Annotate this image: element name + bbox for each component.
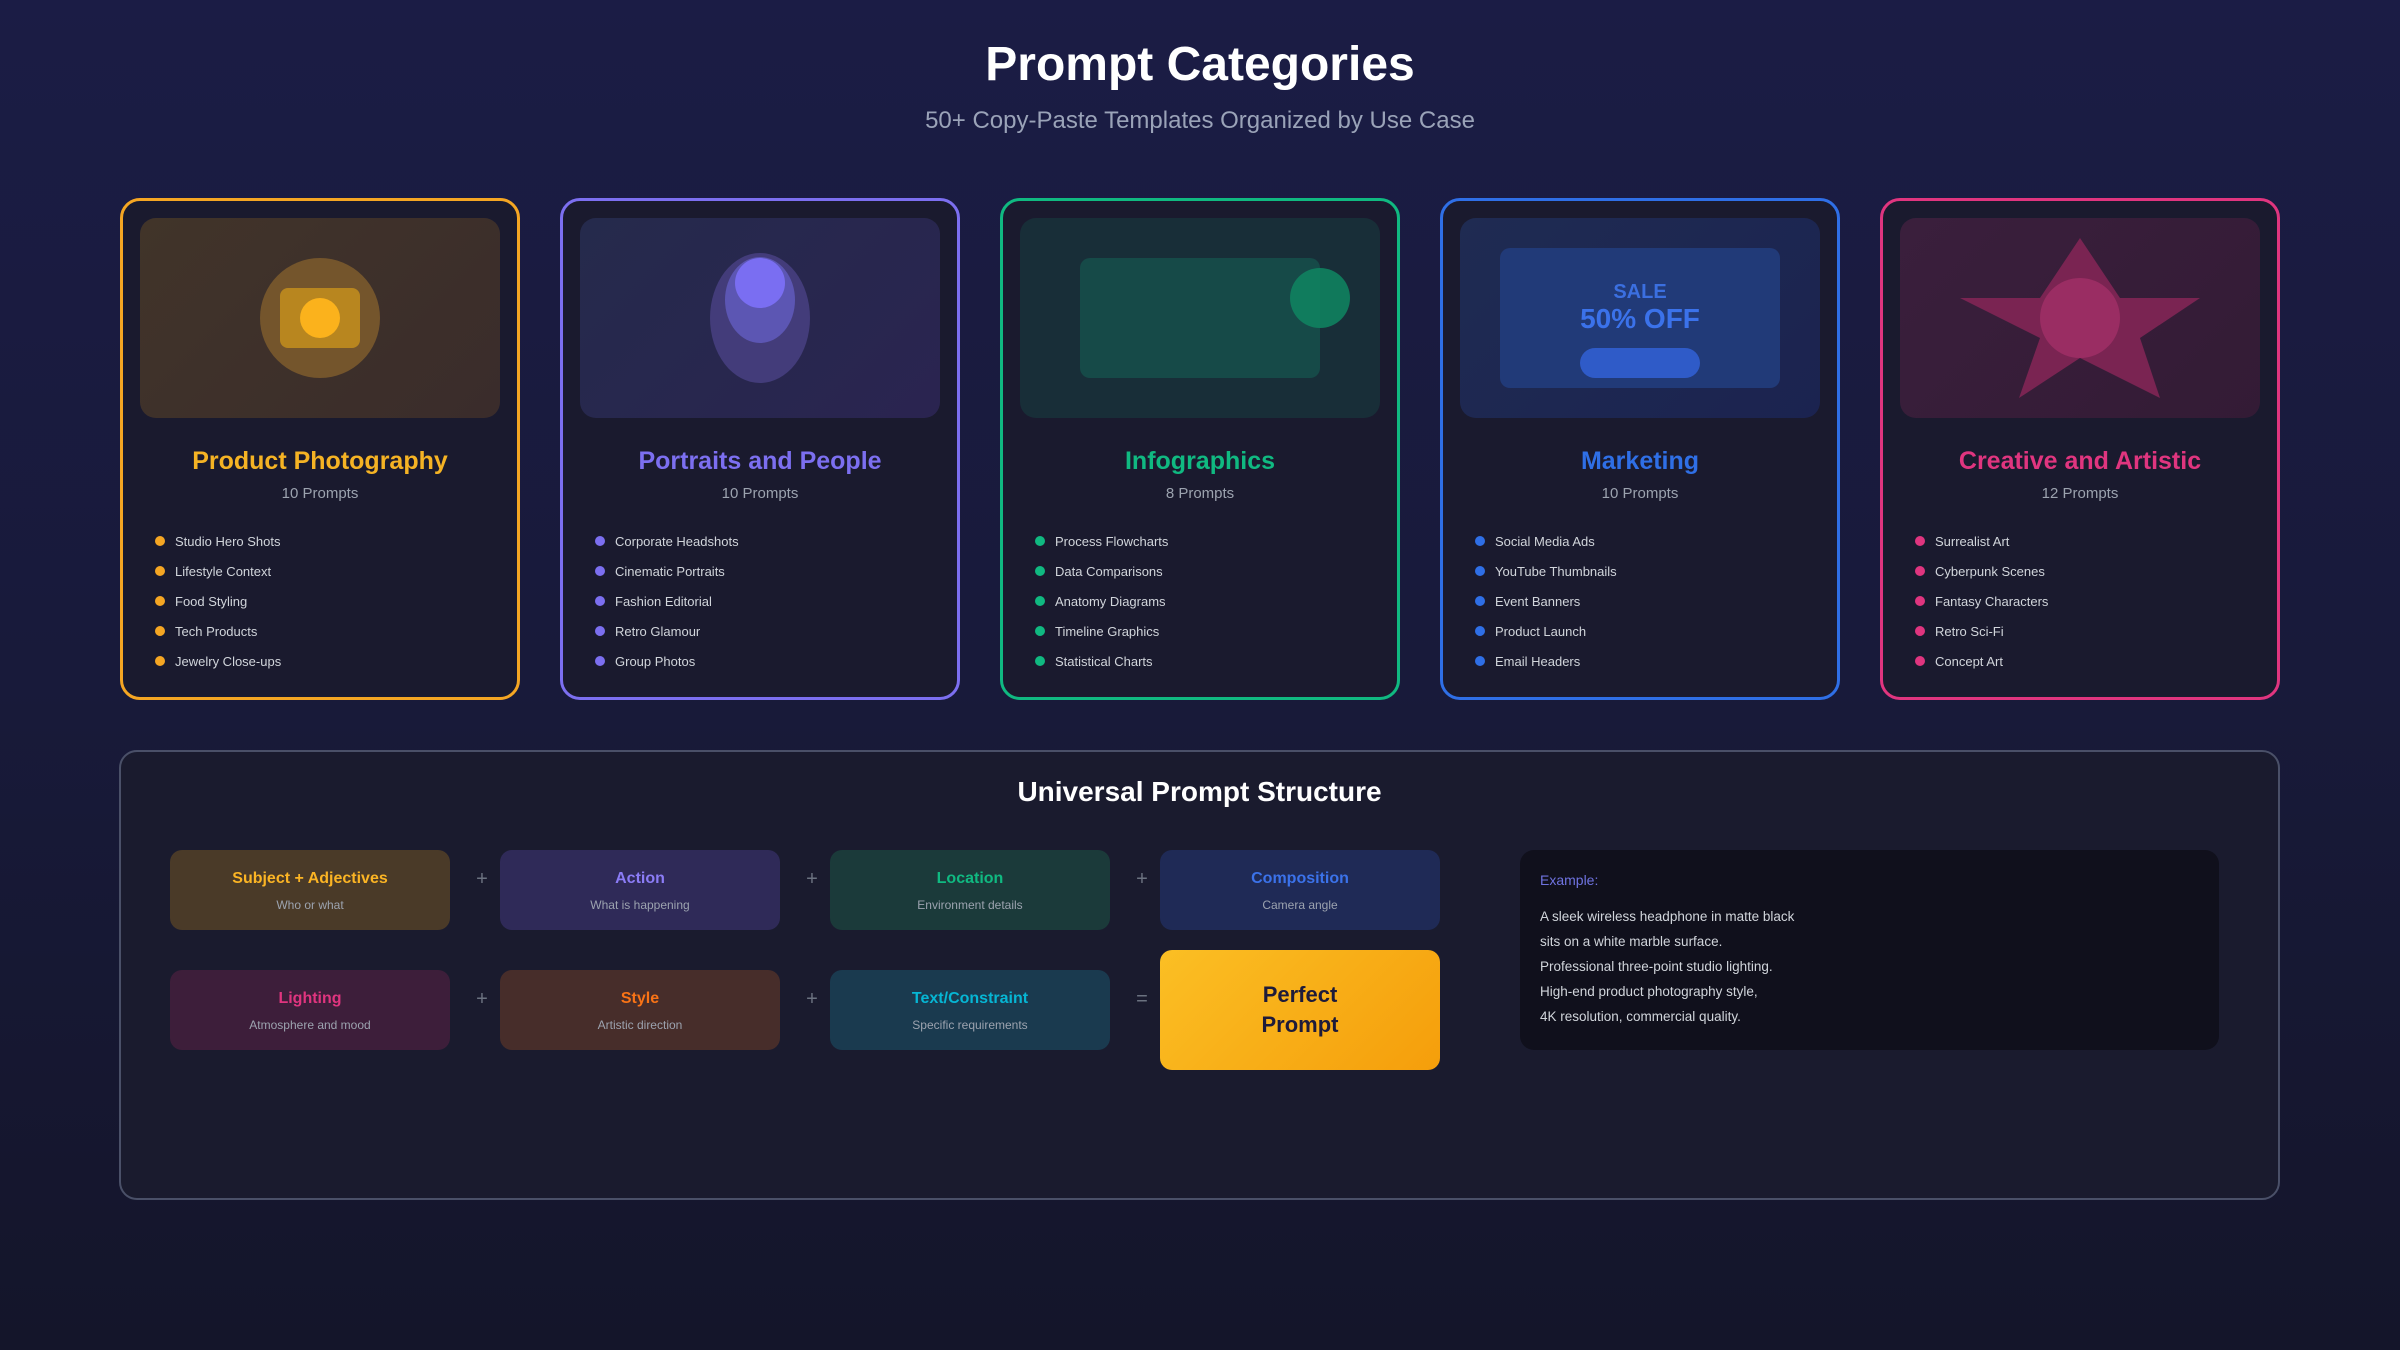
count: 10 Prompts xyxy=(1602,485,1678,502)
box: composition: Composition xyxy=(1251,870,1349,887)
count: 10 Prompts xyxy=(282,485,358,502)
heading: Product Photography xyxy=(192,447,448,475)
panel: universal prompt structure xyxy=(119,750,2280,1200)
box: composition: Camera angle xyxy=(1262,898,1338,912)
list: Retro Glamour xyxy=(615,624,700,638)
box: perfect prompt: Perfect xyxy=(1263,982,1337,1007)
box: lighting xyxy=(170,970,450,1050)
example box xyxy=(1520,850,2219,1050)
subtitle: 50+ Copy-Paste Templates Organized by Use Case xyxy=(925,107,1475,134)
list: Lifestyle Context xyxy=(175,564,271,578)
box: action: Action xyxy=(615,870,665,887)
box: text constraint: Text/Constraint xyxy=(912,990,1028,1007)
box: style xyxy=(500,970,780,1050)
plus: + xyxy=(476,988,488,1010)
example text: 4K resolution, commercial quality. xyxy=(1540,1009,1741,1024)
box: perfect prompt: Prompt xyxy=(1262,1012,1338,1037)
list: Studio Hero Shots xyxy=(175,534,281,548)
box: text constraint: Specific requirements xyxy=(912,1018,1028,1032)
list xyxy=(1035,534,1168,668)
plus: + xyxy=(806,988,818,1010)
icon: sale banner: 50% OFF xyxy=(1580,303,1700,334)
list: Concept Art xyxy=(1935,654,2003,668)
example text: sits on a white marble surface. xyxy=(1540,934,1722,949)
plus: + xyxy=(1136,868,1148,890)
list: Cyberpunk Scenes xyxy=(1935,564,2045,578)
list xyxy=(1915,534,2048,668)
list: Tech Products xyxy=(175,624,257,638)
box: text constraint xyxy=(830,970,1110,1050)
list: Surrealist Art xyxy=(1935,534,2009,548)
icon: person xyxy=(580,218,940,418)
list: Cinematic Portraits xyxy=(615,564,725,578)
panel: product photography xyxy=(120,198,520,700)
heading: Marketing xyxy=(1581,447,1699,475)
plus: + xyxy=(806,868,818,890)
list: Fantasy Characters xyxy=(1935,594,2048,608)
box: perfect prompt xyxy=(1160,950,1440,1070)
list xyxy=(155,534,281,668)
list: Data Comparisons xyxy=(1055,564,1163,578)
list xyxy=(595,534,739,668)
box: style: Style xyxy=(621,990,659,1007)
example text: Professional three-point studio lighting. xyxy=(1540,959,1773,974)
list: Event Banners xyxy=(1495,594,1580,608)
equals: = xyxy=(1136,988,1148,1010)
heading: Infographics xyxy=(1125,447,1275,475)
box: composition xyxy=(1160,850,1440,930)
icon: chart xyxy=(1020,218,1380,418)
list: Statistical Charts xyxy=(1055,654,1153,668)
box: action: What is happening xyxy=(590,898,690,912)
heading: Universal Prompt Structure xyxy=(1017,776,1382,807)
box: lighting: Lighting xyxy=(278,990,342,1007)
list: Anatomy Diagrams xyxy=(1055,594,1166,608)
count: 8 Prompts xyxy=(1166,485,1234,502)
box: lighting: Atmosphere and mood xyxy=(249,1018,371,1032)
icon: camera xyxy=(140,218,500,418)
list: Process Flowcharts xyxy=(1055,534,1168,548)
box: location: Environment details xyxy=(917,898,1023,912)
box: location xyxy=(830,850,1110,930)
heading: Portraits and People xyxy=(638,447,882,475)
panel: creative xyxy=(1880,198,2280,700)
box: action xyxy=(500,850,780,930)
list xyxy=(1475,534,1617,668)
box: subject xyxy=(170,850,450,930)
icon: sale banner: SALE xyxy=(1613,281,1667,303)
box: subject: Subject + Adjectives xyxy=(232,870,388,887)
list: Jewelry Close-ups xyxy=(175,654,281,668)
list: Email Headers xyxy=(1495,654,1580,668)
plus: + xyxy=(476,868,488,890)
list: Corporate Headshots xyxy=(615,534,739,548)
list: Retro Sci-Fi xyxy=(1935,624,2004,638)
example text: High-end product photography style, xyxy=(1540,984,1758,999)
list: Social Media Ads xyxy=(1495,534,1595,548)
example label: Example: xyxy=(1540,872,1598,888)
panel: marketing xyxy=(1440,198,1840,700)
heading: Creative and Artistic xyxy=(1959,447,2201,475)
count: 12 Prompts xyxy=(2042,485,2118,502)
list: Food Styling xyxy=(175,594,247,608)
box: location: Location xyxy=(937,870,1003,887)
icon: star xyxy=(1900,218,2260,418)
panel: portraits xyxy=(560,198,960,700)
count: 10 Prompts xyxy=(722,485,798,502)
example text xyxy=(1540,909,1794,1024)
example text: A sleek wireless headphone in matte black xyxy=(1540,909,1794,924)
box: style: Artistic direction xyxy=(598,1018,682,1032)
box: subject: Who or what xyxy=(276,898,344,912)
list: Group Photos xyxy=(615,654,695,668)
list: Timeline Graphics xyxy=(1055,624,1159,638)
list: Fashion Editorial xyxy=(615,594,712,608)
icon: sale banner xyxy=(1460,218,1820,418)
title: Prompt Categories xyxy=(985,38,1415,91)
panel: infographics xyxy=(1000,198,1400,700)
list: YouTube Thumbnails xyxy=(1495,564,1617,578)
list: Product Launch xyxy=(1495,624,1586,638)
